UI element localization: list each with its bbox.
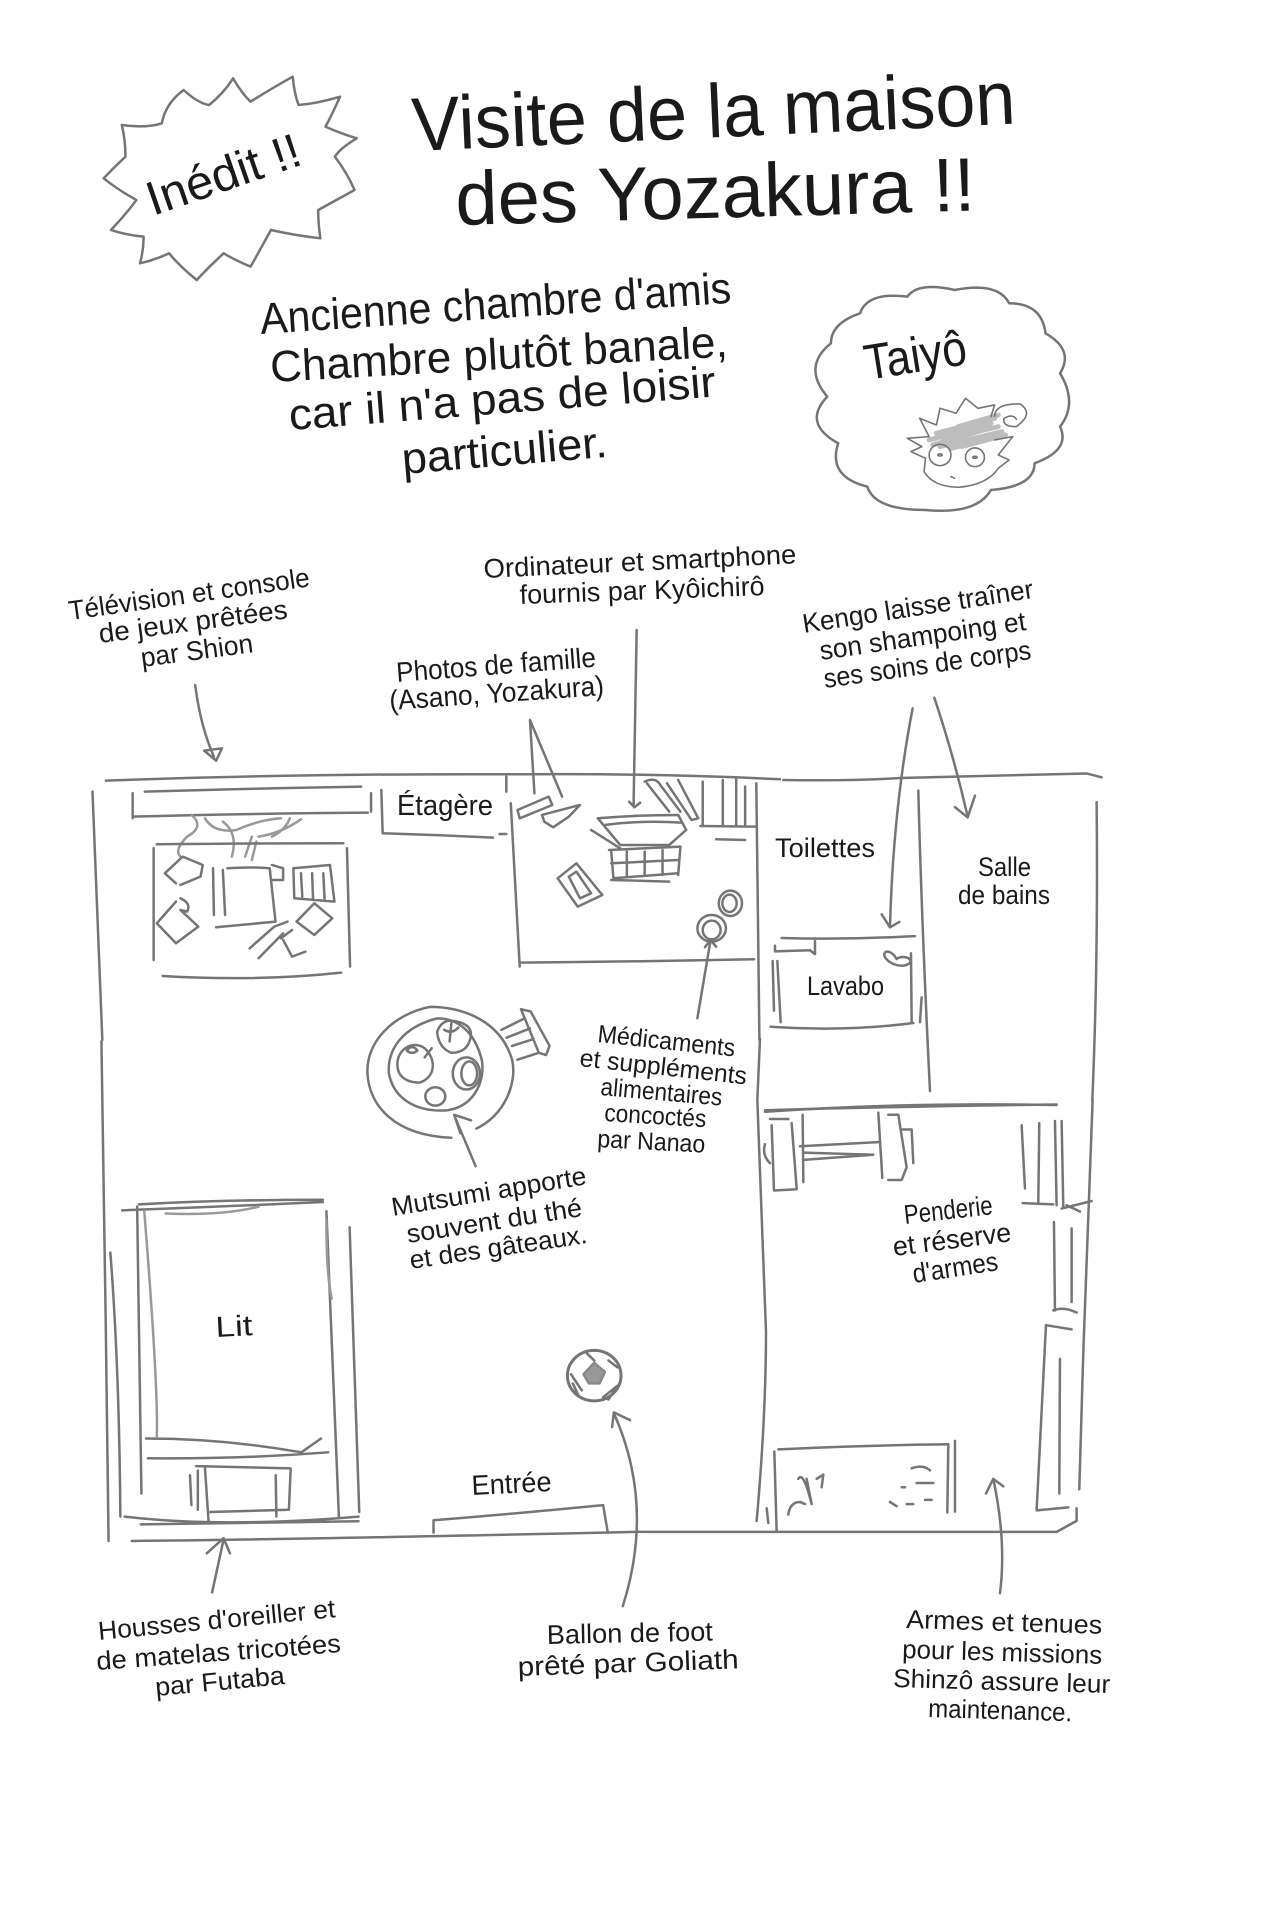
callout: Shinzô: pour les missions [902, 1634, 1103, 1670]
callout: Shinzô [893, 1604, 1111, 1727]
callout: Goliath [517, 1617, 739, 1682]
callout: medicines: Médicaments [596, 1020, 737, 1062]
callout: family photos [388, 642, 605, 716]
callout: television: par Shion [139, 628, 255, 673]
room labels: Penderie [902, 1190, 994, 1230]
furniture: closet, weights, weapons [764, 1104, 1092, 1531]
furniture: TV shelf and console table [133, 787, 371, 978]
callout: Futaba: Housses d'oreiller et [97, 1593, 337, 1646]
callout: computer [483, 539, 797, 610]
arrow: Goliath [612, 1412, 637, 1606]
badge: Inédit [104, 77, 357, 280]
title: des Yozakura !! [454, 143, 976, 242]
badge: Inédit: Inédit !! [139, 124, 308, 226]
arrow: Futaba [207, 1538, 230, 1592]
callout: Goliath: prêté par Goliath [517, 1644, 739, 1682]
room labels: d'armes [910, 1246, 1000, 1289]
furniture: desk with photos, computer, phone, medicines [517, 778, 756, 942]
callout: computer: fournis par Kyôichirô [519, 571, 765, 610]
arrow: medicines [697, 940, 716, 1018]
callout: medicines [578, 1020, 748, 1159]
callout: Kengo: son shampoing et [818, 606, 1028, 666]
callout: family photos: Photos de famille [395, 642, 597, 688]
callout: Futaba [95, 1593, 342, 1702]
floor plan [92, 630, 1102, 1606]
furniture: low table with tea and cakes [367, 1007, 550, 1138]
intro text: Ancienne chambre d'amis [258, 264, 733, 344]
furniture: bed [122, 1200, 359, 1524]
callout: family photos: (Asano, Yozakura) [388, 670, 605, 716]
arrow: weapons [986, 1479, 1003, 1593]
arrow: family photos [530, 720, 562, 797]
starburst outline [104, 77, 357, 280]
walls [92, 773, 1102, 1541]
room labels: Entrée [471, 1466, 552, 1501]
furniture: shelf [381, 790, 506, 838]
arrow: Mutsumi [454, 1115, 476, 1166]
room labels: Salle [978, 852, 1031, 882]
callout: Futaba: par Futaba [154, 1660, 287, 1702]
icon: soccer ball [567, 1350, 621, 1401]
callout: television: de jeux prêtées [97, 594, 289, 649]
room labels: Lavabo [807, 971, 884, 1001]
callout: Shinzô: Armes et tenues [906, 1604, 1103, 1640]
intro text [258, 264, 733, 484]
callout: computer: Ordinateur et smartphone [483, 539, 797, 584]
callout: television: Télévision et console [67, 562, 311, 626]
callout: Shinzô: Shinzô assure leur [893, 1663, 1111, 1699]
title: Visite de la maison [410, 56, 1017, 168]
callout: medicines: concoctés [604, 1099, 707, 1133]
furniture: sink [771, 936, 922, 1029]
arrow: computer [629, 630, 640, 807]
callout: Mutsumi [389, 1160, 589, 1275]
callout: Mutsumi: et des gâteaux. [407, 1219, 589, 1275]
cloud outline [815, 287, 1069, 511]
callout: Mutsumi: Mutsumi apporte [389, 1160, 588, 1222]
callout: Futaba: de matelas tricotées [95, 1628, 342, 1676]
room labels: Lit [215, 1310, 253, 1344]
arrow: Kengo to sink [882, 708, 913, 927]
callout: medicines: alimentaires [599, 1073, 723, 1112]
intro text: Chambre plutôt banale, [269, 317, 729, 392]
callout: Mutsumi: souvent du thé [404, 1192, 584, 1249]
callout: Shinzô: maintenance. [928, 1693, 1073, 1727]
room labels: Toilettes [775, 833, 875, 863]
callout: Goliath: Ballon de foot [546, 1617, 714, 1650]
room labels: de bains [958, 880, 1050, 910]
character bubble: Taiyô: Taiyô [860, 319, 970, 391]
callout: television [67, 562, 311, 673]
callout: medicines: par Nanao [597, 1125, 706, 1159]
room labels [215, 789, 1050, 1501]
intro text: car il n'a pas de loisir [287, 358, 717, 440]
icon: Taiyô face [907, 398, 1027, 487]
callout: Kengo [800, 574, 1035, 694]
furniture: entrance step [434, 1505, 608, 1533]
room labels: et réserve [891, 1217, 1013, 1262]
callout: Kengo: Kengo laisse traîner [800, 574, 1035, 639]
callout: Kengo: ses soins de corps [822, 635, 1033, 694]
intro text: particulier. [400, 418, 609, 484]
callout: medicines: et suppléments [578, 1044, 748, 1090]
arrow: television [195, 685, 222, 761]
character bubble: Taiyô [815, 287, 1069, 511]
arrow: Kengo to bathroom [934, 698, 975, 817]
title [410, 56, 1017, 242]
room labels: Étagère [397, 789, 493, 822]
